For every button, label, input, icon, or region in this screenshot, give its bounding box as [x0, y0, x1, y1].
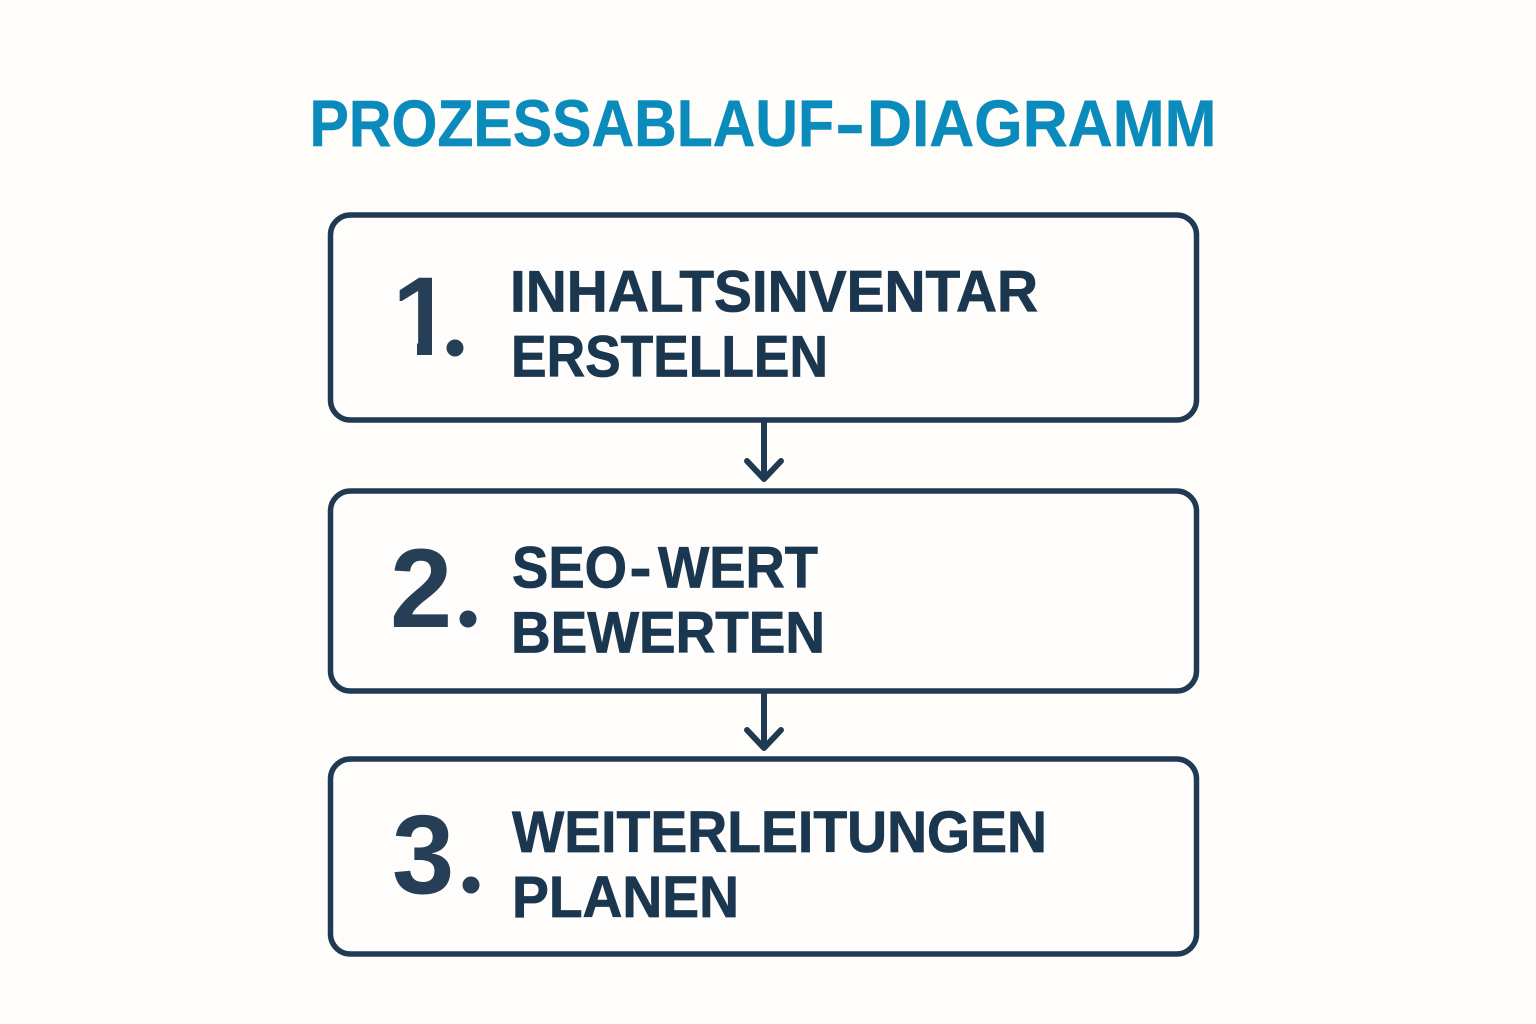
- step 1 box: [330, 215, 1196, 420]
- step 1 label: INHALTSINVENTAR: [510, 260, 1038, 324]
- step 1 number: [400, 278, 464, 356]
- step 2 number: 2: [390, 526, 452, 651]
- step 2 label: -: [630, 536, 652, 600]
- step 3 box: [330, 759, 1196, 954]
- title: PROZESSABLAUF: [310, 86, 834, 160]
- step 1 number: .: [447, 301, 464, 368]
- step 2 box: [330, 491, 1196, 691]
- panel: step 1: [330, 215, 1196, 420]
- panel: step 2: [330, 491, 1196, 691]
- step 2 number: .: [460, 572, 477, 639]
- panel: step 3: [330, 759, 1196, 954]
- step 3 label: WEITERLEITUNGEN: [512, 800, 1047, 865]
- step 3 number: .: [463, 838, 480, 905]
- step 2 label: WERT: [658, 536, 818, 600]
- arrow: step 1 to step 2: [747, 421, 781, 479]
- step 1 label: ERSTELLEN: [511, 324, 828, 390]
- step 3 label: PLANEN: [512, 865, 739, 930]
- title: -: [835, 86, 865, 160]
- step 2 label: SEO: [512, 536, 627, 600]
- arrow: step 2 to step 3: [747, 692, 781, 748]
- title: DIAGRAMM: [867, 86, 1216, 160]
- step 2 label: BEWERTEN: [511, 600, 825, 666]
- step 3 number: 3: [392, 792, 454, 917]
- step 1 number: 1: [392, 254, 454, 379]
